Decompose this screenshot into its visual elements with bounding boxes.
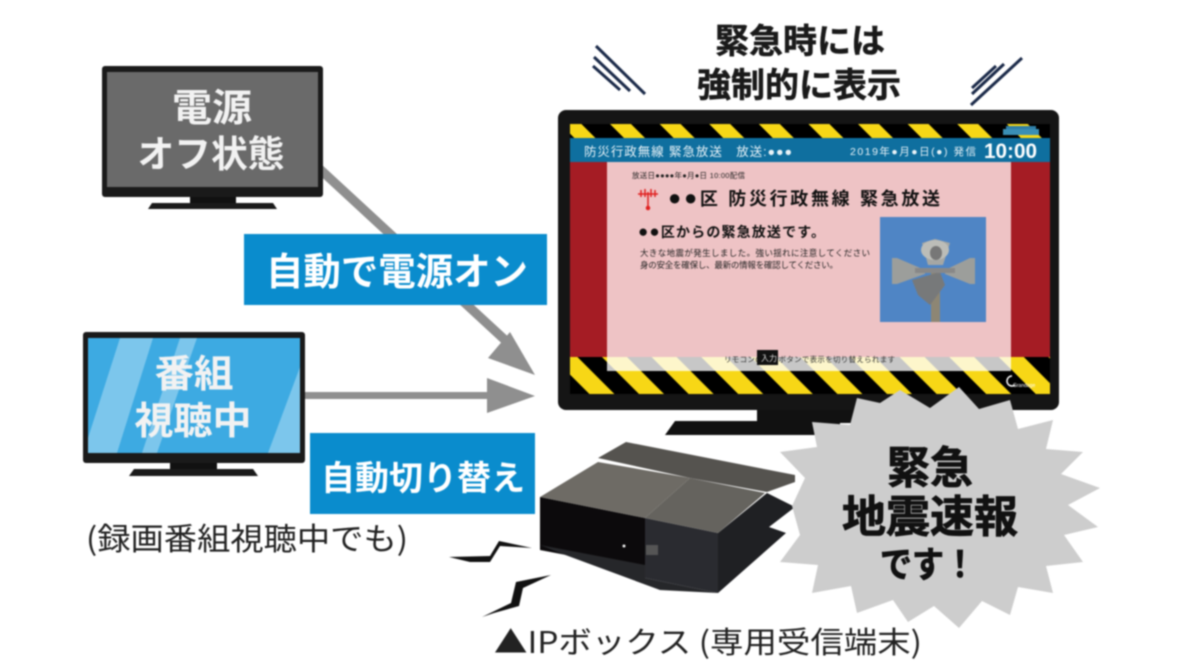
TV: watching a programme: 番組	[154, 354, 234, 396]
main TV	[558, 110, 1059, 435]
TV: power off state	[102, 66, 323, 209]
broadcast body text	[640, 248, 870, 270]
logo top right	[1003, 126, 1039, 135]
hazard stripes top	[570, 124, 1050, 138]
TV body	[558, 110, 1059, 410]
blue header bar: 防災行政無線 緊急放送 放送:●●●	[584, 144, 792, 159]
blue header bar: 10:00	[984, 140, 1037, 163]
callout: emergency earthquake alert: 緊急	[887, 444, 973, 493]
label: automatic power on: 自動で電源オン	[266, 252, 528, 294]
callout: emergency earthquake alert: です！	[880, 544, 976, 585]
screen: emergency broadcast	[570, 124, 1050, 394]
broadcast body text: 大きな地震が発生しました。強い揺れに注意してください	[640, 248, 870, 258]
blue header bar: 2019年●月●日(●) 発信	[850, 145, 976, 158]
broadcast title: ●●区 防災行政無線 緊急放送	[668, 185, 940, 210]
bottom notice	[724, 350, 895, 365]
label: automatic switching: 自動切り替え	[321, 460, 525, 498]
heading: forced display in emergencies: 強制的に表示	[697, 67, 901, 105]
broadcast subtitle: ●●区からの緊急放送です。	[638, 222, 825, 241]
caption: IP box: ▲IPボックス (専用受信端末)	[494, 618, 922, 662]
icon: shake lines right	[971, 58, 1022, 105]
label: automatic power on	[244, 234, 547, 305]
icon: shake lines left	[593, 46, 645, 94]
note: even while watching recordings: (録画番組視聴中でも)	[86, 514, 408, 559]
callout: emergency earthquake alert	[780, 387, 1100, 628]
logo bottom right	[1007, 376, 1035, 389]
icon: signal bolt lower	[482, 575, 551, 617]
TV: power off state: 電源	[172, 88, 252, 130]
arrow: viewing TV to main TV	[300, 378, 535, 413]
bottom notice: 入力	[761, 353, 777, 363]
broadcast body text: 身の安全を確保し、最新の情報を確認してください。	[640, 260, 838, 270]
TV stand	[665, 405, 857, 435]
pink message panel	[607, 162, 1011, 357]
TV: watching a programme: 視聴中	[134, 401, 252, 443]
icon: red antenna	[638, 189, 658, 210]
arrow: power-off TV to main TV	[314, 163, 535, 375]
callout: emergency earthquake alert: 地震速報	[842, 493, 1018, 542]
TV: power off state: オフ状態	[138, 134, 284, 175]
IP box device	[540, 442, 795, 593]
heading: forced display in emergencies: 緊急時には	[715, 23, 885, 61]
heading: forced display in emergencies	[697, 23, 901, 105]
photo: loudspeaker tower	[880, 217, 986, 322]
logo bottom right: Grandage	[1013, 383, 1035, 389]
hazard stripes bottom	[570, 357, 1050, 394]
bottom notice: リモコンの ボタンで表示を切り替えられます	[724, 354, 895, 364]
TV: watching a programme	[83, 332, 305, 476]
small date line: 放送日●●●●年●月●日 10:00配信	[632, 170, 746, 180]
icon: signal bolt upper	[449, 541, 532, 562]
blue header bar	[570, 138, 1050, 163]
label: automatic switching	[310, 433, 535, 514]
